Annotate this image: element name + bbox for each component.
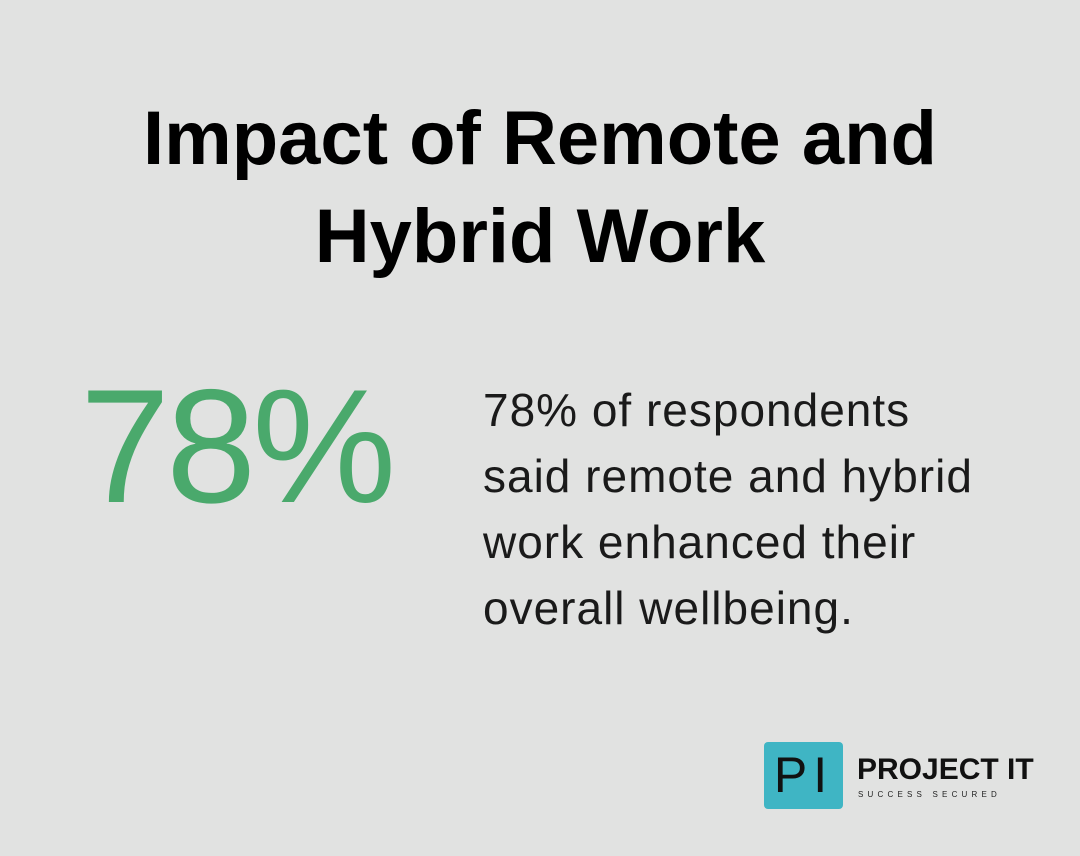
title: Impact of Remote and [143,96,937,181]
title [143,96,937,279]
description [483,384,973,634]
description: 78% of respondents [483,384,910,436]
tagline: SUCCESS SECURED [858,790,1001,799]
logo icon [764,742,843,809]
logo [764,742,1034,809]
description: said remote and hybrid [483,450,973,502]
description: overall wellbeing. [483,582,854,634]
big stat: 78% [80,356,392,537]
title: Hybrid Work [315,194,765,279]
logo name: PROJECT IT [857,753,1034,786]
logo icon: PI [774,747,833,803]
description: work enhanced their [483,516,916,568]
